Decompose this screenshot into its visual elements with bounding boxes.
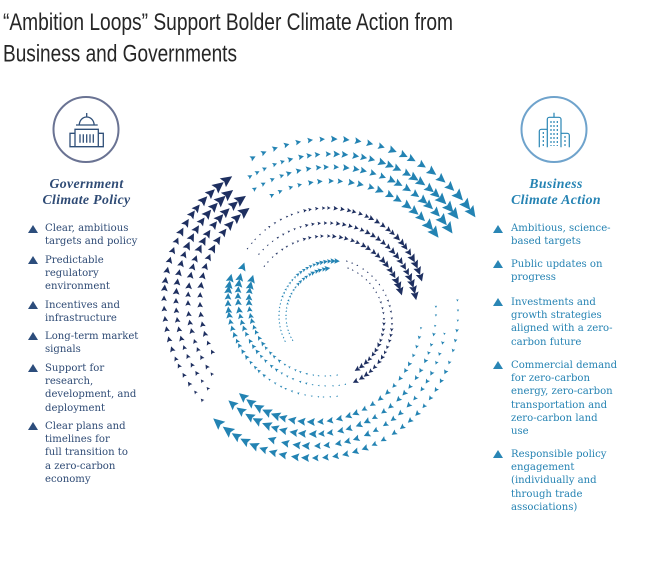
right list item 3: growth strategies xyxy=(511,310,602,321)
title: “Ambition Loops” Support Bolder Climate Action from xyxy=(3,9,453,36)
left list item 2 xyxy=(45,254,110,292)
left list item 6: Clear plans and xyxy=(45,420,126,432)
left list item 3: Incentives and xyxy=(45,300,120,310)
right list item 4: use xyxy=(511,426,529,437)
right list item 2: Public updates on xyxy=(511,258,603,270)
left list item 3 xyxy=(45,300,120,324)
right list item 4: transportation and xyxy=(511,400,607,411)
left list item 5: research, xyxy=(45,376,93,387)
right list item 3: carbon future xyxy=(511,337,581,348)
right list item 1: based targets xyxy=(511,236,581,247)
right list item 2: progress xyxy=(511,272,556,283)
left list item 6: timelines for xyxy=(45,434,110,445)
left list item 1: targets and policy xyxy=(45,236,137,247)
middle navy arc, top right xyxy=(247,206,426,301)
left list item 6: full transition to xyxy=(45,447,128,458)
left list item 5 xyxy=(45,362,136,414)
right list item 4: energy, zero-carbon xyxy=(511,386,613,397)
heading: government climate policy: Government xyxy=(49,176,124,191)
heading: business climate action: Business xyxy=(529,176,583,191)
right list item 2 xyxy=(511,258,603,283)
heading: government climate policy xyxy=(42,176,131,207)
heading: business climate action xyxy=(511,176,601,207)
left list item 6: a zero-carbon xyxy=(45,461,115,472)
left list item 1 xyxy=(45,223,138,247)
outer blue arc, bottom xyxy=(210,299,459,462)
heading: government climate policy: Climate Policy xyxy=(42,192,131,207)
left list item 1: Clear, ambitious xyxy=(45,223,128,234)
right list item 3: Investments and xyxy=(511,296,596,308)
left list item 2: regulatory xyxy=(45,268,99,279)
right list item 3: aligned with a zero- xyxy=(511,323,613,334)
middle blue arc, lower left xyxy=(224,261,346,398)
right list item 5: (individually and xyxy=(511,475,597,486)
title xyxy=(3,9,453,68)
left list item 5: Support for xyxy=(45,362,104,374)
title: Business and Governments xyxy=(3,40,237,68)
outer navy arc, left xyxy=(161,172,253,402)
left list item 4: signals xyxy=(45,344,81,355)
left list item 6 xyxy=(45,420,128,485)
left list item 2: Predictable xyxy=(45,254,104,266)
icon: business buildings xyxy=(522,97,586,162)
left list item 2: environment xyxy=(45,281,110,292)
right list item 1 xyxy=(510,223,611,247)
icon: government capitol xyxy=(54,97,118,162)
right list item 4: for zero-carbon xyxy=(511,373,590,384)
right list item 5 xyxy=(511,448,606,513)
right list item 3 xyxy=(511,296,613,348)
left list item 6: economy xyxy=(45,474,91,485)
left list item 4: Long-term market xyxy=(45,330,138,342)
right list item 5: through trade xyxy=(511,489,582,500)
right list item 4 xyxy=(511,360,617,437)
left list item 3: infrastructure xyxy=(45,313,117,324)
right list item 5: Responsible policy xyxy=(511,448,606,460)
right list item 4: Commercial demand xyxy=(511,360,617,370)
inner navy arc, right xyxy=(346,260,394,385)
left list item 5: deployment xyxy=(45,403,105,414)
heading: business climate action: Climate Action xyxy=(511,192,601,207)
left list item 5: development, and xyxy=(45,389,136,400)
left list item 4 xyxy=(45,330,138,355)
right list item 5: engagement xyxy=(511,462,574,473)
right list item 4: zero-carbon land xyxy=(511,413,598,424)
right list item 5: associations) xyxy=(511,502,577,513)
right list item 1: Ambitious, science- xyxy=(511,223,611,234)
innermost blue arc xyxy=(278,258,340,342)
outer blue arc, top right xyxy=(247,136,480,241)
